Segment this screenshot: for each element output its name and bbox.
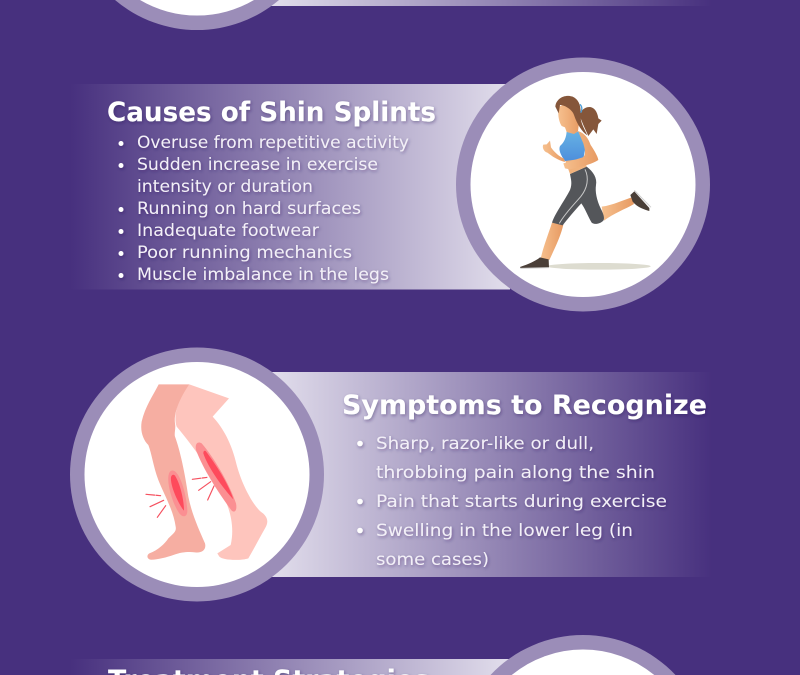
causes list: Inadequate footwear (137, 220, 319, 240)
symptoms gradient band (270, 372, 712, 577)
causes list: intensity or duration (137, 176, 313, 196)
symptoms list: Pain that starts during exercise (376, 491, 667, 511)
causes list: Running on hard surfaces (137, 198, 361, 218)
symptoms list: throbbing pain along the shin (376, 462, 655, 482)
symptoms list: Sharp, razor-like or dull, (376, 433, 594, 453)
causes list (118, 132, 409, 284)
icon: sore legs in circle (70, 348, 324, 602)
panel: previous section (cropped at top) (115, 0, 712, 30)
treatment circle (490, 635, 676, 675)
icon: runner in circle (456, 58, 710, 312)
causes list: Poor running mechanics (137, 242, 352, 262)
causes list: Sudden increase in exercise (137, 154, 378, 174)
treatment gradient band (70, 659, 510, 675)
symptoms list: Swelling in the lower leg (in (376, 520, 633, 540)
symptoms heading: Symptoms to Recognize (342, 390, 707, 421)
causes heading: Causes of Shin Splints (107, 97, 436, 128)
causes list: Muscle imbalance in the legs (137, 264, 389, 284)
symptoms list (357, 433, 667, 569)
panel: symptoms to recognize (70, 348, 712, 602)
causes list: Overuse from repetitive activity (137, 132, 409, 152)
causes gradient band (70, 84, 510, 290)
panel: treatment strategies (70, 635, 676, 675)
symptoms list: some cases) (376, 549, 489, 569)
panel: causes of shin splints (70, 58, 710, 312)
